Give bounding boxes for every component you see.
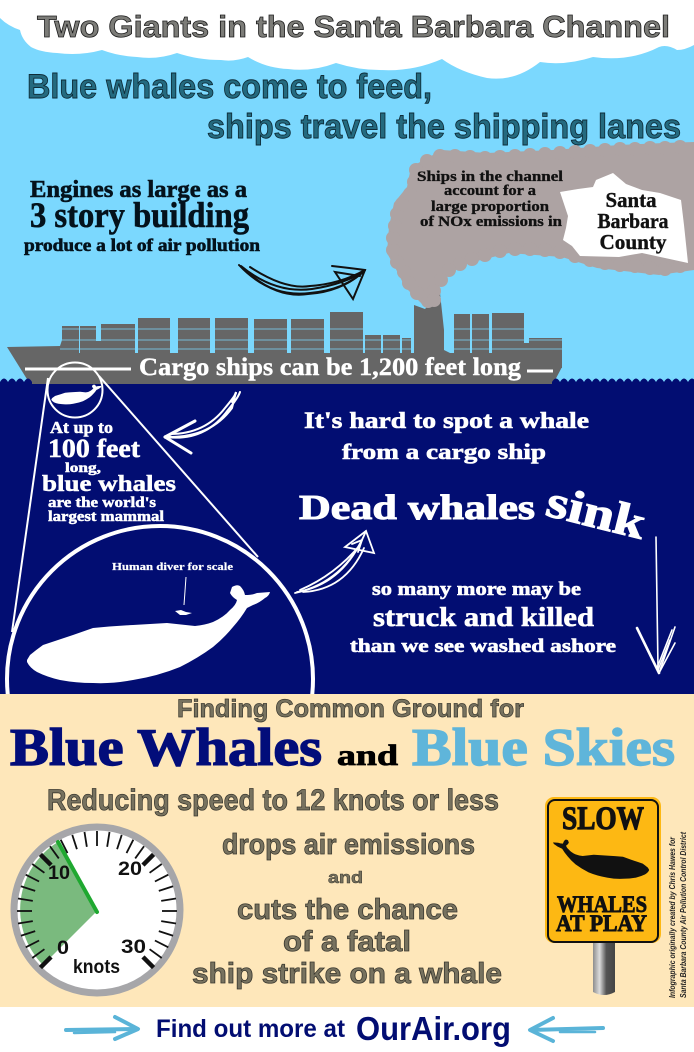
text: engines: 3 story building — [30, 195, 249, 235]
text: dead whales sink — [299, 475, 651, 549]
text: NOx emissions: account for a — [444, 183, 537, 199]
text: engines: Engines as large as a — [30, 177, 247, 203]
icon: small whale — [52, 385, 101, 404]
ship hull — [7, 340, 562, 384]
gauge green zone — [20, 842, 97, 965]
gauge labels: 10 — [48, 863, 70, 884]
text: struck and killed: struck and killed — [373, 602, 594, 632]
sign board — [545, 797, 661, 943]
sign post — [593, 942, 615, 995]
gauge needle — [58, 842, 97, 912]
text: whale size: largest mammal — [48, 509, 164, 525]
gauge ticks — [17, 831, 177, 968]
county label — [598, 188, 669, 254]
smoke plume — [386, 140, 694, 308]
title: Two Giants in the Santa Barbara Channel — [37, 9, 670, 44]
gauge labels: 30 — [121, 937, 146, 958]
cloud banner — [0, 0, 694, 79]
county label: Barbara — [598, 209, 669, 233]
arrow: left footer arrow — [66, 1017, 138, 1039]
text: hard to spot: It's hard to spot a whale — [304, 408, 589, 433]
sign text: WHALES — [557, 892, 647, 917]
sign text — [556, 801, 647, 936]
text: drops air emissions: and — [328, 868, 363, 887]
heading: finding common ground: Finding Common Ground for — [177, 695, 524, 723]
heading: blue whales and blue skies — [10, 719, 675, 777]
diver label: Human diver for scale — [112, 562, 233, 573]
panel: ocean — [0, 378, 694, 694]
big whale — [27, 585, 270, 683]
arrow: white arrow to whale text — [165, 392, 240, 453]
arrow: white down arrow — [637, 537, 675, 673]
sign whale — [553, 840, 649, 879]
text: NOx emissions: Ships in the channel — [417, 169, 563, 185]
gauge — [14, 827, 180, 993]
text: dead whales sink: Dead whales — [299, 488, 535, 527]
text: engines — [24, 177, 260, 255]
gauge dial — [14, 827, 180, 993]
credit text: Infographic originally created by Chris Hawes for — [667, 836, 677, 998]
text: reducing speed: Reducing speed to 12 knots or less — [47, 784, 499, 817]
slow sign — [545, 797, 661, 995]
ship containers — [62, 312, 562, 368]
sign text: SLOW — [562, 801, 644, 837]
gauge labels — [48, 859, 146, 978]
footer text: Find out more at — [156, 1015, 346, 1043]
text: drops air emissions: of a fatal — [283, 926, 411, 958]
text: NOx emissions: of NOx emissions in — [420, 214, 563, 230]
gauge labels: 20 — [118, 859, 142, 880]
county label: County — [600, 230, 667, 254]
heading: blue whales and blue skies: and — [337, 739, 398, 772]
heading: blue whales and blue skies: Blue Skies — [412, 719, 675, 777]
footer text — [156, 1010, 511, 1047]
text: drops air emissions: cuts the chance — [237, 894, 458, 926]
text: struck and killed: than we see washed ashore — [350, 636, 616, 657]
panel: footer — [0, 1007, 694, 1052]
heading: blue whales and blue skies: Blue Whales — [10, 719, 322, 777]
subtitle: blue whales and ships — [27, 68, 681, 146]
Santa Barbara County map — [560, 173, 688, 263]
text: whale size: 100 feet — [48, 434, 140, 463]
zoom cone: small circle to large circle — [5, 362, 315, 694]
credit text — [667, 831, 688, 998]
subtitle: blue whales and ships: Blue whales come to feed, — [27, 68, 432, 106]
footer text: OurAir.org — [356, 1010, 511, 1047]
text: drops air emissions: drops air emissions — [222, 829, 475, 861]
ship funnel — [414, 293, 452, 354]
county label: Santa — [606, 188, 657, 212]
text: whale size — [42, 418, 176, 525]
text: engines: produce a lot of air pollution — [24, 235, 260, 255]
text: struck and killed — [350, 579, 616, 657]
credit text: Santa Barbara County Air Pollution Control District — [678, 831, 688, 998]
text: NOx emissions: large proportion — [431, 199, 550, 215]
text: NOx emissions — [417, 169, 563, 230]
arrow: white arrow to dead whales — [295, 531, 374, 593]
text: whale size: long, — [65, 461, 101, 476]
text: whale size: are the world's — [48, 495, 156, 511]
sign text: AT PLAY — [556, 911, 647, 936]
text: hard to spot — [304, 408, 589, 464]
gauge labels: 0 — [57, 938, 69, 959]
arrow: sketched black arrow to smoke — [239, 265, 365, 299]
text: dead whales sink: sink — [542, 475, 651, 549]
panel: cream background — [0, 694, 694, 1007]
icon: diver with pointer — [175, 577, 192, 615]
gauge labels: knots — [73, 957, 120, 978]
text: struck and killed: so many more may be — [372, 579, 581, 600]
text: drops air emissions — [192, 829, 502, 990]
ship — [7, 293, 565, 384]
subtitle: blue whales and ships: ships travel the shipping lanes — [207, 108, 681, 146]
text: whale size: blue whales — [42, 471, 176, 496]
text: hard to spot: from a cargo ship — [342, 439, 546, 464]
ship length label: Cargo ships can be 1,200 feet long — [139, 354, 522, 381]
panel: sky background — [0, 0, 694, 384]
text: drops air emissions: ship strike on a whale — [192, 958, 502, 990]
arrow: right footer arrow — [530, 1018, 603, 1041]
text: whale size: At up to — [50, 418, 113, 437]
